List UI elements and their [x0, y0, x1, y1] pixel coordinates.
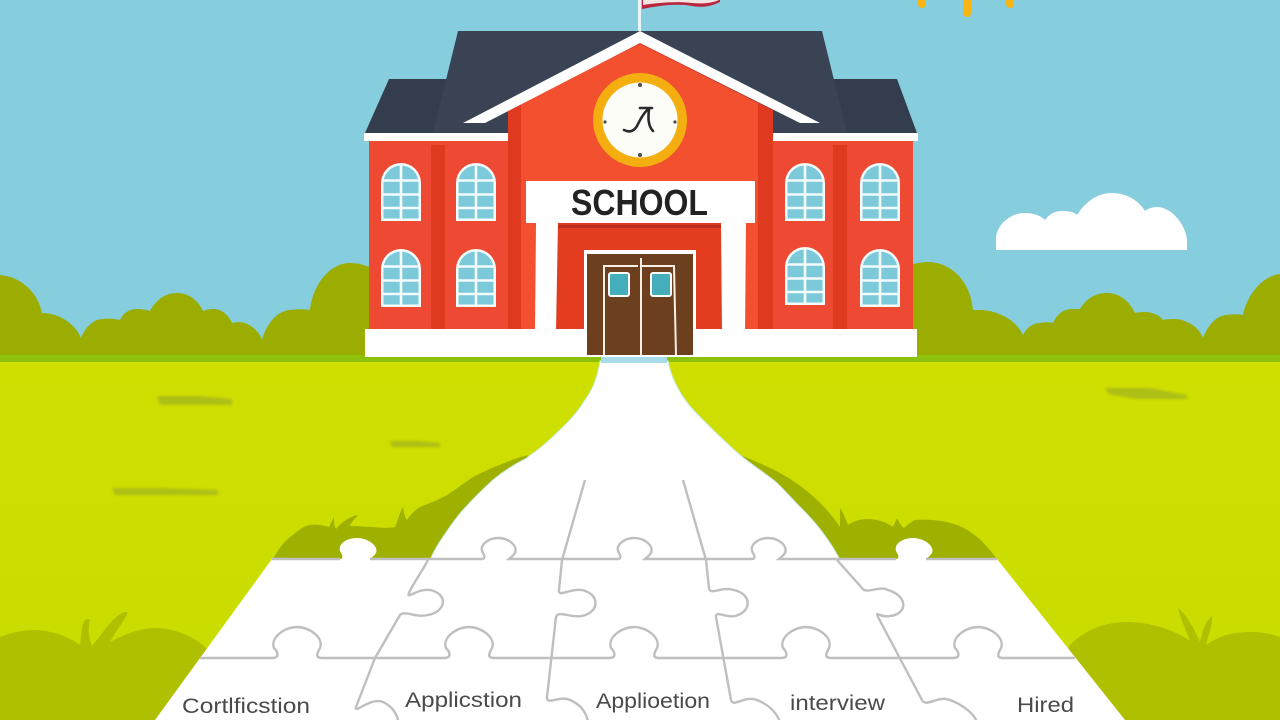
icon: cloud	[996, 193, 1187, 250]
bottom left bush	[0, 612, 230, 720]
left column	[535, 223, 558, 332]
right wing	[771, 140, 913, 330]
left wing	[369, 140, 509, 330]
right column	[721, 223, 746, 332]
ground: grass field	[0, 362, 1280, 720]
road surface	[430, 361, 840, 560]
clock	[593, 73, 687, 167]
bottom right bush	[1050, 608, 1280, 720]
step label: hired: Hired	[1017, 694, 1074, 717]
puzzle pathway	[155, 480, 1125, 720]
windows upper left	[381, 163, 496, 221]
ground: horizon strip	[0, 355, 1280, 363]
puzzle base	[155, 538, 1125, 720]
road threshold	[601, 356, 667, 363]
side roof left	[365, 79, 450, 133]
step label: certification: Cortlficstion	[182, 695, 310, 718]
path: white road to school	[430, 356, 840, 560]
windows lower right	[785, 247, 900, 307]
step label: application second: Applioetion	[596, 690, 710, 713]
side roof right	[830, 79, 917, 133]
school building	[364, 0, 918, 357]
flag	[638, 0, 720, 33]
right bush beside path	[740, 455, 997, 559]
entrance recess	[545, 223, 735, 330]
right hedge	[905, 262, 1280, 358]
left hedge	[0, 263, 372, 358]
pediment trim	[463, 31, 820, 123]
puzzle seams	[200, 480, 1075, 720]
eaves	[364, 133, 918, 141]
base plinth	[365, 329, 917, 357]
grass tufts	[112, 388, 1187, 495]
step label: application: Applicstion	[405, 689, 522, 712]
central gable	[508, 43, 773, 330]
windows upper right	[785, 163, 900, 221]
icon: sun rays	[922, 0, 1010, 13]
left bush beside path	[273, 455, 528, 559]
sky	[0, 0, 1280, 362]
windows lower left	[381, 249, 496, 307]
sign board	[526, 181, 755, 223]
step label: interview: interview	[790, 692, 886, 715]
sign text: SCHOOL	[571, 182, 708, 223]
doors	[584, 250, 696, 357]
main roof	[433, 31, 847, 133]
